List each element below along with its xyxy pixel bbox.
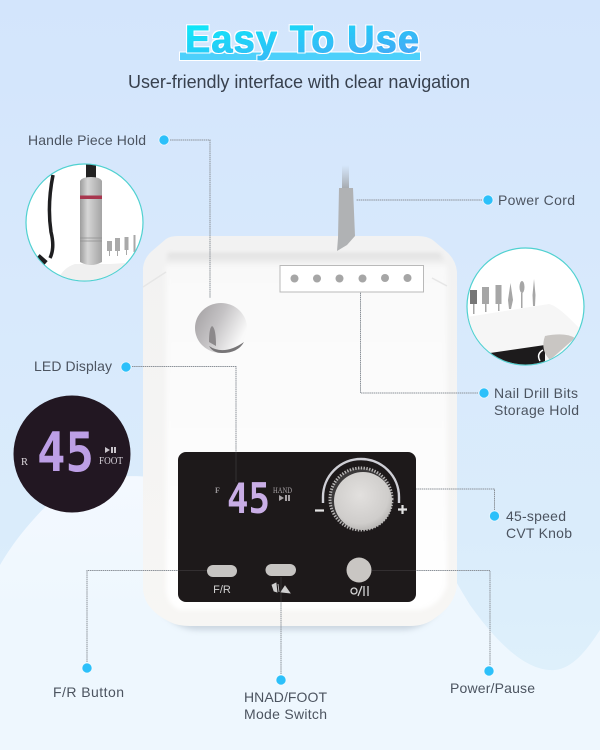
cord wire bbox=[342, 165, 349, 191]
storage outline bbox=[280, 266, 424, 292]
inset: drill bits bbox=[467, 248, 590, 370]
device top face bbox=[166, 253, 447, 610]
power button bbox=[346, 558, 372, 596]
callout: drill bits storage hold bbox=[360, 292, 579, 418]
knob detail bbox=[543, 334, 575, 360]
handpiece base bbox=[60, 263, 126, 280]
callout: power/pause bbox=[372, 570, 535, 696]
panel display bbox=[215, 474, 292, 523]
black cords bbox=[49, 175, 53, 258]
callout: F/R button bbox=[53, 570, 207, 700]
callout: drill bits storage hold: Storage Hold bbox=[494, 402, 579, 418]
callout: drill bits storage hold: Nail Drill Bits bbox=[494, 385, 578, 401]
device shell bbox=[143, 236, 457, 626]
callout: handle piece hold bbox=[28, 132, 210, 298]
callout: mode switch: Mode Switch bbox=[244, 706, 327, 722]
red band bbox=[80, 196, 102, 199]
control panel bbox=[178, 452, 416, 602]
nail drill bits storage bbox=[280, 266, 424, 292]
handle piece hole bbox=[195, 303, 247, 353]
speed knob bbox=[330, 468, 392, 530]
minus and plus bbox=[315, 505, 407, 514]
device body bbox=[143, 236, 457, 630]
callout: speed knob bbox=[416, 489, 572, 541]
callout: mode switch bbox=[244, 577, 327, 722]
panel corner bbox=[490, 345, 545, 364]
panel background bbox=[178, 452, 416, 602]
title underline bbox=[180, 52, 420, 60]
title text: Easy To Use bbox=[185, 19, 419, 61]
storage holes bbox=[290, 274, 412, 282]
callout: LED display bbox=[34, 358, 236, 482]
inset: LED display bbox=[14, 396, 130, 512]
panel display: HAND bbox=[273, 486, 292, 495]
callout: handle piece hold: Handle Piece Hold bbox=[28, 132, 146, 148]
mode button bbox=[266, 564, 296, 593]
callout: LED display: LED Display bbox=[34, 358, 112, 374]
callout: power cord bbox=[356, 192, 575, 208]
power cord bbox=[337, 165, 355, 251]
panel display: 45 bbox=[227, 474, 270, 523]
callout: speed knob: CVT Knob bbox=[506, 525, 572, 541]
F/R button bbox=[207, 565, 237, 596]
drill bits bbox=[107, 235, 136, 256]
callout: power cord: Power Cord bbox=[498, 192, 575, 208]
inset: LED display: R bbox=[21, 457, 28, 468]
panel display: F bbox=[215, 486, 220, 495]
speed arc bbox=[323, 459, 399, 503]
subtitle: User-friendly interface with clear navigation bbox=[128, 72, 470, 92]
callout: F/R button: F/R Button bbox=[53, 684, 124, 700]
handpiece bbox=[80, 177, 102, 265]
inset: LED display: 45 bbox=[37, 421, 94, 484]
callout: power/pause: Power/Pause bbox=[450, 680, 535, 696]
drill bits bbox=[470, 279, 536, 314]
title bbox=[180, 19, 420, 61]
corner seams bbox=[143, 272, 447, 287]
device shadow bbox=[155, 600, 445, 630]
inset: LED display: FOOT bbox=[99, 456, 123, 467]
inset: handle piece bbox=[26, 164, 143, 285]
cord connector bbox=[337, 188, 355, 251]
F/R button: F/R bbox=[213, 584, 231, 596]
callout: mode switch: HNAD/FOOT bbox=[244, 689, 327, 705]
storage base bbox=[468, 304, 580, 364]
callout: speed knob: 45-speed bbox=[506, 508, 566, 524]
